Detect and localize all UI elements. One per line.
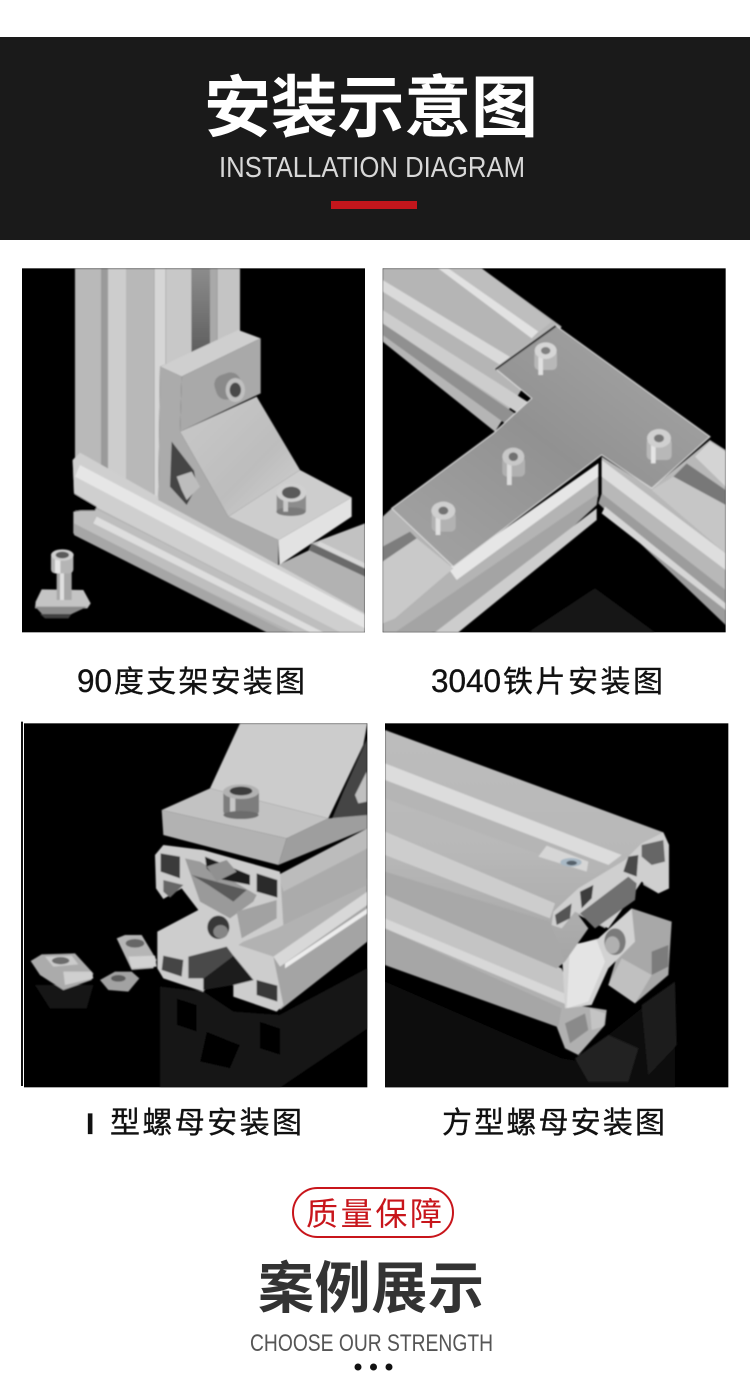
caption: 3040 plate: 3040 [431, 663, 501, 699]
lower-left beam [383, 463, 598, 632]
lower beam [385, 918, 607, 1055]
caption: 3040 plate: 铁片安装图 [503, 666, 663, 699]
upper-left beam [383, 268, 562, 432]
I glyph: I [86, 1108, 94, 1141]
title: 安装示意图 [204, 71, 538, 146]
caption: 90 degree bracket: 度支架安装图 [114, 666, 305, 699]
T-nuts [31, 935, 157, 992]
plate bolts [431, 342, 672, 535]
panel: I-type nut photo [21, 722, 368, 1088]
caption: square nut: 方型螺母安装图 [442, 1107, 665, 1140]
hex bolt [223, 784, 259, 819]
upper beam [385, 730, 669, 968]
t-bolt and nut [35, 549, 91, 618]
caption: 90 degree bracket: 90 [77, 663, 112, 699]
floor reflection [528, 588, 655, 632]
right-angle bracket [158, 330, 352, 565]
vertical post [75, 268, 240, 502]
header banner [0, 37, 750, 240]
nut in slot [580, 877, 637, 928]
right beam [598, 440, 726, 625]
panel: 90 degree bracket photo [22, 268, 365, 632]
rear profile leg [608, 908, 672, 1003]
horizontal beam [73, 453, 365, 632]
profile cross-section [155, 845, 283, 1012]
T-shaped plate [392, 325, 710, 567]
quality badge [292, 1187, 454, 1238]
panel: square nut photo [385, 723, 728, 1088]
subtitle: INSTALLATION DIAGRAM [219, 152, 525, 184]
caption: 3040 plate [431, 663, 663, 699]
red accent bar [331, 201, 417, 209]
bracket on profile [162, 723, 367, 865]
reflection [385, 982, 677, 1087]
centre web [562, 908, 635, 1008]
profile end face [552, 832, 669, 928]
quality badge: 质量保障 [306, 1196, 442, 1232]
channel floors and side faces [233, 828, 367, 1010]
caption text: 型螺母安装图 [110, 1107, 302, 1140]
reflection [35, 968, 367, 1087]
panel: T plate photo [382, 268, 726, 632]
section heading: 案例展示 [258, 1257, 484, 1320]
bracket bolts [212, 370, 306, 516]
caption: I-type nut [86, 1107, 302, 1141]
channel floor between beams [385, 894, 566, 994]
three dots [354, 1364, 392, 1370]
